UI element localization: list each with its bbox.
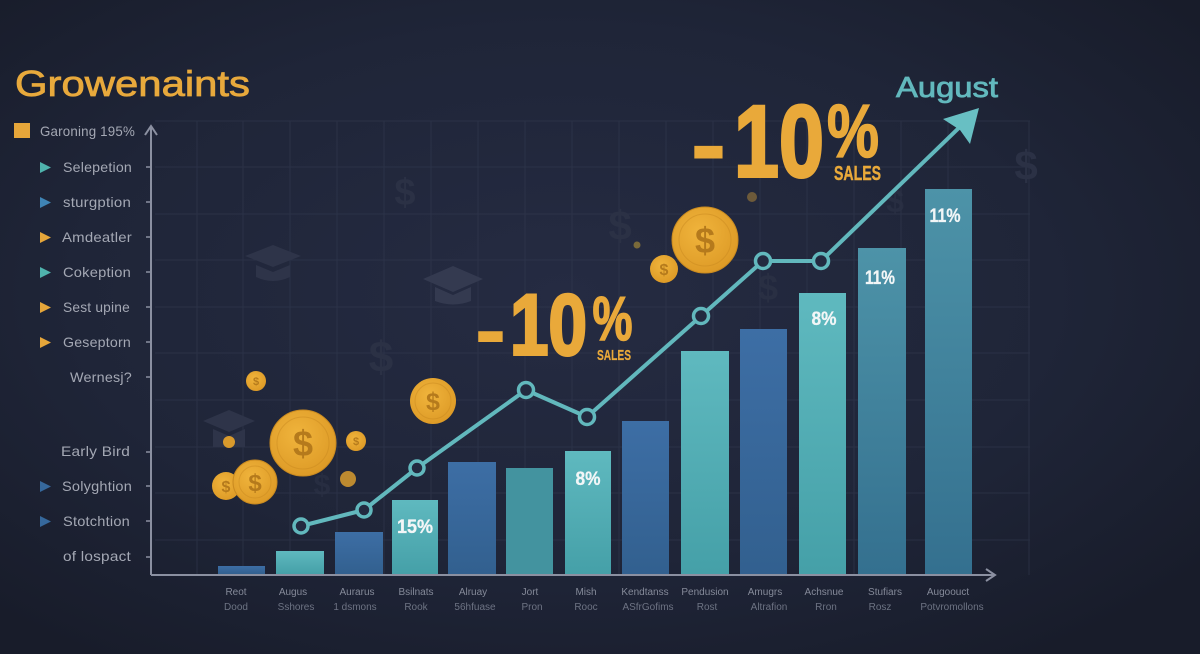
icon: faint dollar: $	[314, 469, 331, 502]
bar 7	[565, 451, 611, 574]
callout: lower -10% sales: %	[592, 285, 632, 354]
coin: $	[426, 388, 440, 416]
legend marker	[40, 516, 51, 527]
label: Potvromollons	[920, 602, 984, 613]
legend item: sturgption	[63, 194, 131, 210]
coin	[747, 192, 757, 202]
label: Dood	[224, 602, 248, 613]
legend item: Wernesj?	[70, 369, 132, 385]
coin	[223, 436, 235, 448]
label: Alruay	[459, 587, 487, 598]
legend item: Solyghtion	[62, 478, 132, 494]
axes	[145, 126, 995, 581]
bar 1	[218, 566, 265, 574]
coin	[270, 410, 336, 476]
faint background icons	[203, 142, 1038, 502]
trend line with arrow	[294, 108, 979, 533]
label: 1 dsmons	[333, 602, 377, 613]
coin	[233, 460, 277, 504]
legend item: Sest upine	[63, 299, 130, 315]
legend item: Stotchtion	[63, 513, 130, 529]
callout: upper -10% sales: -	[690, 84, 727, 202]
callout: lower -10% sales	[474, 278, 632, 380]
icon: faint dollar: $	[608, 202, 632, 249]
coin: $	[222, 479, 231, 496]
label: Pron	[521, 602, 543, 613]
bar 9	[681, 351, 729, 574]
legend item: Cokeption	[63, 264, 131, 280]
legend marker	[40, 267, 51, 278]
label: Stufiars	[868, 587, 902, 598]
bar value: 15%	[397, 517, 433, 538]
coin	[212, 472, 240, 500]
coin	[246, 371, 266, 391]
label: Rron	[815, 602, 837, 613]
coin: $	[695, 220, 715, 261]
label: Rook	[404, 602, 429, 613]
bar 13	[925, 189, 972, 574]
legend marker: square	[14, 123, 30, 138]
icon: faint dollar: $	[758, 267, 778, 308]
label: August: August	[896, 72, 998, 104]
coin	[672, 207, 738, 273]
icon: faint dollar: $	[369, 333, 393, 382]
bar 8	[622, 421, 669, 574]
coin	[634, 242, 640, 248]
bar 11	[799, 293, 846, 574]
bar 3	[335, 532, 383, 574]
label: Bsilnats	[398, 587, 434, 598]
bar 10	[740, 329, 787, 574]
legend item: of lospact	[63, 548, 131, 564]
label: Mish	[575, 587, 597, 598]
callout: upper -10% sales	[690, 84, 881, 202]
icon: faint dollar: $	[394, 172, 416, 214]
coin: $	[293, 423, 313, 464]
callout: lower -10% sales: 10	[510, 278, 587, 374]
coin: $	[253, 376, 259, 388]
legend	[14, 123, 135, 564]
coin: $	[248, 470, 262, 497]
coin	[346, 431, 366, 451]
icon: graduation cap	[203, 410, 255, 447]
label: Rooc	[574, 602, 598, 613]
legend marker	[40, 337, 51, 348]
legend item: Garoning 195%	[40, 123, 135, 139]
legend marker	[40, 197, 51, 208]
bar value: 8%	[812, 309, 837, 330]
label: Augoouct	[927, 587, 969, 598]
bar 6	[506, 468, 553, 574]
legend marker	[40, 232, 51, 243]
x axis labels	[224, 587, 984, 613]
icon: faint dollar: $	[886, 183, 904, 219]
label: 56hfuase	[454, 602, 496, 613]
label: Achsnue	[805, 587, 844, 598]
label: Rost	[697, 602, 718, 613]
legend item: Early Bird	[61, 443, 130, 459]
label: ASfrGofims	[622, 602, 674, 613]
bar value: 8%	[576, 469, 601, 490]
legend item: Amdeatler	[62, 229, 132, 245]
label: Amugrs	[748, 587, 782, 598]
label: Kendtanss	[621, 587, 669, 598]
callout: upper -10% sales: SALES	[834, 163, 881, 185]
icon: graduation cap	[245, 245, 301, 281]
bar value: 11%	[930, 206, 961, 227]
coins	[212, 192, 757, 504]
callout: upper -10% sales: 10	[734, 84, 824, 198]
coin	[340, 471, 356, 487]
label: Aurarus	[339, 587, 375, 598]
label: Rosz	[869, 602, 891, 613]
legend marker	[40, 302, 51, 313]
label: Sshores	[278, 602, 314, 613]
bar 5	[448, 462, 496, 574]
legend item: Selepetion	[63, 159, 132, 175]
title: Growenaints	[15, 63, 250, 104]
bar 2	[276, 551, 324, 574]
coin	[410, 378, 456, 424]
bar 12	[858, 248, 906, 574]
bar chart	[218, 189, 972, 574]
bar value: 11%	[865, 268, 895, 289]
bar 4	[392, 500, 438, 574]
icon: faint dollar: $	[1014, 142, 1038, 189]
callout: lower -10% sales: -	[474, 280, 506, 380]
legend item: Geseptorn	[63, 334, 131, 350]
label: Pendusion	[681, 587, 729, 598]
label: Reot	[225, 587, 247, 598]
coin: $	[660, 262, 669, 279]
label: Altrafion	[751, 602, 787, 613]
label: Augus	[279, 587, 307, 598]
legend marker	[40, 162, 51, 173]
coin: $	[353, 436, 359, 448]
legend marker	[40, 481, 51, 492]
label: Jort	[522, 587, 539, 598]
coin	[650, 255, 678, 283]
icon: graduation cap	[423, 266, 483, 304]
callout: lower -10% sales: SALES	[597, 347, 631, 364]
callout: upper -10% sales: %	[827, 89, 879, 173]
arrow head	[943, 108, 979, 144]
